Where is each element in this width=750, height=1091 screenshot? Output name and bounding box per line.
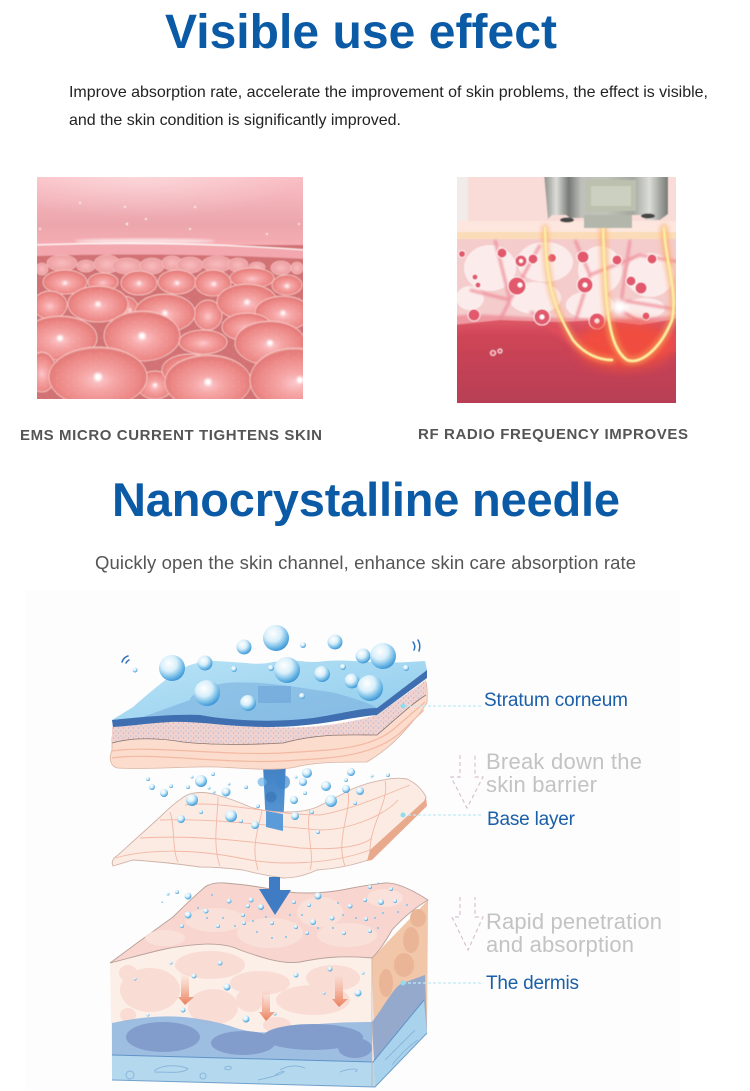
heading: Nanocrystalline needle: Nanocrystalline needle: [112, 473, 620, 526]
intro paragraph: [69, 84, 708, 129]
callout lines: [400, 704, 483, 986]
title: Visible use effect: Visible use effect: [165, 6, 557, 59]
caption: EMS: EMS MICRO CURRENT TIGHTENS SKIN: [20, 427, 322, 444]
dashed arrow: break down: [451, 755, 483, 808]
label: The dermis: The dermis: [486, 973, 579, 994]
diagram: stratum corneum layer: [110, 660, 427, 769]
icon: signal marks: [122, 640, 420, 663]
label: Break down the skin barrier: skin barrier: [486, 772, 597, 797]
diagram: dermis block: [110, 882, 428, 1087]
caption: RF: RF RADIO FREQUENCY IMPROVES: [418, 426, 688, 443]
bubbles above stratum corneum: [132, 625, 409, 711]
label: Rapid penetration and absorption: and absorption: [486, 932, 634, 957]
orange arrows in dermis: [178, 973, 348, 1021]
intro paragraph: Improve absorption rate, accelerate the improvement of skin problems, the effect is visible,: [69, 84, 708, 101]
label: Rapid penetration and absorption: [486, 909, 662, 957]
label: Rapid penetration and absorption: Rapid penetration: [486, 909, 662, 934]
RF glow: [577, 321, 673, 369]
dashed arrow: rapid penetration: [452, 897, 483, 950]
arrow: blue upper shaft: [258, 760, 290, 831]
diagram backdrop: [25, 590, 680, 1091]
label: Break down the skin barrier: Break down the: [486, 749, 642, 774]
photo: EMS skin cells: [37, 177, 303, 399]
label: Base layer: Base layer: [487, 809, 576, 830]
RF device head: [544, 177, 668, 220]
arrow: blue penetration arrow: [259, 877, 291, 915]
subheading: Quickly open the skin channel, enhance skin care absorption rate: [95, 552, 636, 573]
photo: RF radio frequency: [453, 173, 680, 407]
label: Break down the skin barrier: [486, 749, 642, 797]
label: Stratum corneum: Stratum corneum: [484, 690, 628, 711]
diagram: base layer sheet with bubbles: [112, 768, 427, 878]
intro paragraph: and the skin condition is significantly improved.: [69, 112, 401, 129]
